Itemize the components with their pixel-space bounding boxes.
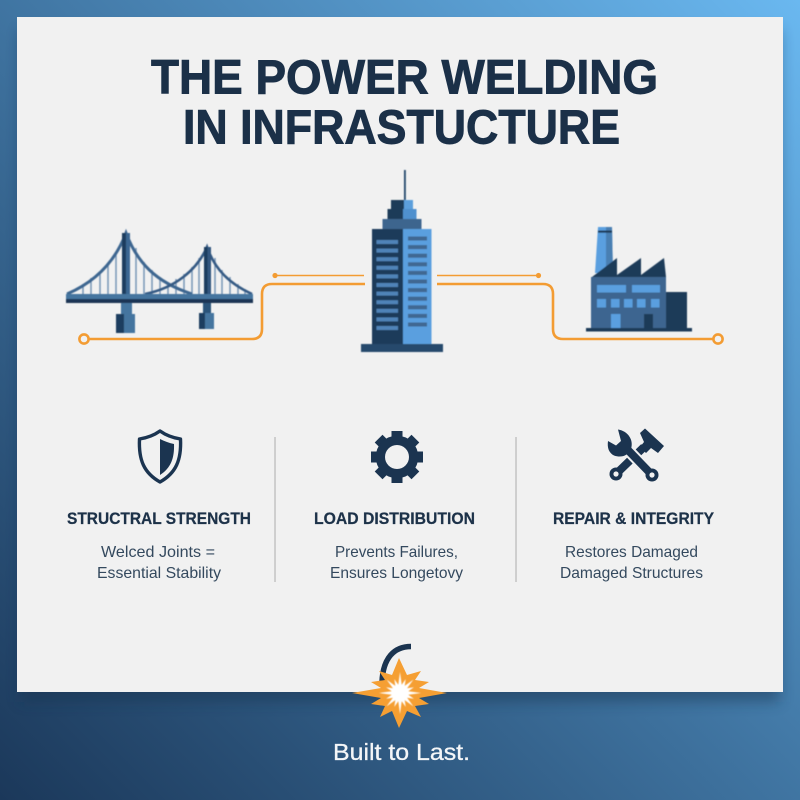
text: restores damaged: [560, 544, 703, 582]
title: IN INFRASTUCTURE: [183, 102, 620, 154]
icon: welding spark: [352, 658, 447, 728]
text: welded joints: Essential Stability: [97, 565, 221, 582]
column: structural strength: [67, 509, 251, 582]
icon: gear: [371, 431, 423, 483]
text: prevents failures: Prevents Failures,: [335, 544, 458, 561]
text: welded joints: [97, 544, 221, 582]
column: load distribution: [314, 509, 475, 582]
title: THE POWER WELDING: [151, 52, 658, 104]
panel shadow: [20, 30, 780, 702]
icon: shield: [139, 431, 181, 482]
divider: [515, 437, 517, 582]
column: repair and integrity: [553, 509, 715, 582]
orange connector lines: [79, 273, 723, 344]
text: welded joints: Welced Joints =: [101, 544, 215, 561]
icon: skyscraper: [361, 170, 443, 352]
icon: suspension bridge: [66, 233, 253, 333]
heading: structural strength: STRUCTRAL STRENGTH: [67, 509, 251, 528]
heading: load distribution: LOAD DISTRIBUTION: [314, 509, 475, 528]
text: restores damaged: Damaged Structures: [560, 565, 703, 582]
heading: repair and integrity: REPAIR & INTEGRITY: [553, 509, 715, 528]
icon: wrench and hammer: [608, 428, 664, 482]
title: [151, 52, 658, 154]
text: prevents failures: [330, 544, 463, 582]
text: prevents failures: Ensures Longetovy: [330, 565, 463, 582]
icon: factory: [586, 227, 692, 332]
text: restores damaged: Restores Damaged: [565, 544, 698, 561]
divider: [274, 437, 276, 582]
icon: welding torch arc: [382, 646, 411, 682]
tagline: Built to Last.: [333, 739, 470, 765]
